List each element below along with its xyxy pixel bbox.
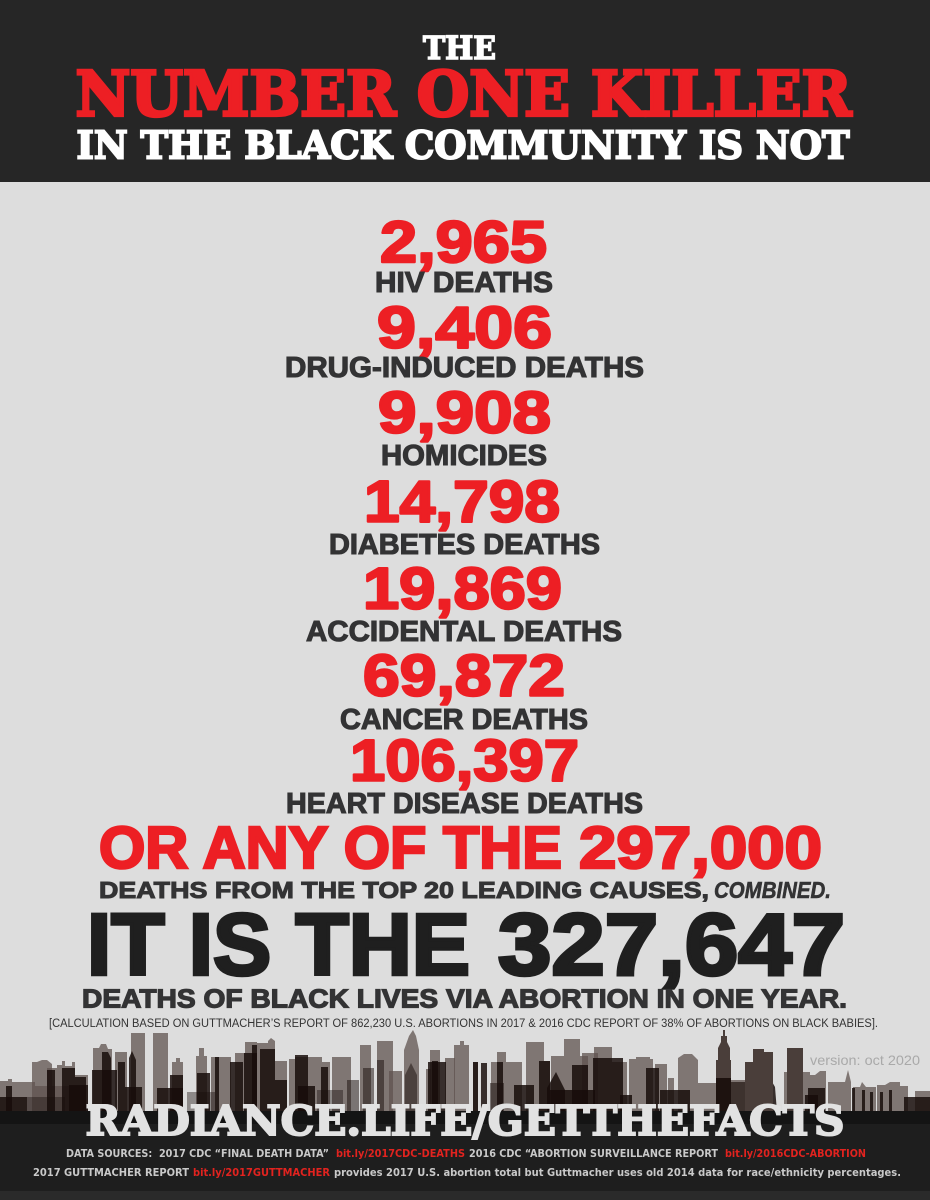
- data sources line 1: [66, 1148, 866, 1160]
- stat: diabetes deaths: DIABETES DEATHS: [329, 529, 600, 561]
- city skyline: [0, 1030, 930, 1112]
- data sources line 1: DATA SOURCES: 2017 CDC “FINAL DEATH DATA”: [66, 1148, 329, 1160]
- stat: diabetes deaths: 14,798: [364, 470, 560, 534]
- stat: homicides: HOMICIDES: [381, 440, 547, 472]
- stat: top 20 causes combined: DEATHS FROM THE TOP 20 LEADING CAUSES,: [99, 877, 709, 903]
- data sources line 2: bit.ly/2017GUTTMACHER: [193, 1167, 330, 1179]
- header band with title: [0, 0, 930, 182]
- stat: heart disease deaths: 106,397: [350, 728, 579, 794]
- stat: cancer deaths: CANCER DEATHS: [340, 704, 588, 736]
- subhead: abortion deaths: DEATHS OF BLACK LIVES VIA ABORTION IN ONE YEAR.: [82, 986, 847, 1014]
- stat: homicides: 9,908: [378, 380, 551, 446]
- title line: THE: THE: [423, 29, 496, 67]
- stat: accidental deaths: 19,869: [363, 556, 562, 622]
- data sources line 2: provides 2017 U.S. abortion total but Guttmacher uses old 2014 data for race/ethnicity percentages.: [334, 1167, 901, 1179]
- footer band: [0, 1096, 930, 1200]
- stat: drug-induced deaths: [285, 296, 644, 384]
- stat: cancer deaths: 69,872: [363, 644, 565, 708]
- stat: top 20 causes combined: 297,000: [579, 815, 822, 881]
- data sources line 2: [33, 1167, 901, 1179]
- stat: accidental deaths: ACCIDENTAL DEATHS: [306, 616, 622, 648]
- empire state tower: [716, 1030, 731, 1112]
- stat: heart disease deaths: HEART DISEASE DEATHS: [286, 788, 643, 820]
- headline stat: 327,647: 327,647: [498, 896, 845, 994]
- data sources line 1: 2016 CDC “ABORTION SURVEILLANCE REPORT: [469, 1148, 719, 1160]
- stat: drug-induced deaths: 9,406: [377, 296, 552, 360]
- data sources line 1: bit.ly/2017CDC-DEATHS: [336, 1148, 465, 1160]
- stat: cancer deaths: [340, 644, 588, 736]
- stat: HIV deaths: HIV DEATHS: [375, 267, 553, 299]
- stat: homicides: [378, 380, 551, 472]
- stat: drug-induced deaths: DRUG-INDUCED DEATHS: [285, 352, 644, 384]
- stat: diabetes deaths: [329, 470, 600, 561]
- title line: in the black community is not: IN THE BLACK COMMUNITY IS NOT: [76, 124, 850, 168]
- stat: top 20 causes combined: [99, 815, 831, 903]
- data sources line 1: bit.ly/2016CDC-ABORTION: [725, 1148, 866, 1160]
- stat: HIV deaths: [375, 210, 553, 299]
- website call to action: RADIANCE.LIFE/GETTHEFACTS: [86, 1096, 845, 1145]
- stat: top 20 causes combined: OR ANY OF THE: [99, 815, 562, 881]
- stat: top 20 causes combined: COMBINED.: [714, 877, 831, 903]
- title line: NUMBER ONE KILLER: NUMBER ONE KILLER: [76, 58, 852, 130]
- calculation note: [CALCULATION BASED ON GUTTMACHER’S REPORT OF 862,230 U.S. ABORTIONS IN 2017 & 2016 CDC REPORT OF 38% OF ABORTIONS ON BLACK BABIES].: [49, 1018, 878, 1030]
- version note: version: oct 2020: [810, 1052, 920, 1068]
- headline stat: 327,647: IT IS THE: [87, 896, 470, 994]
- stat: accidental deaths: [306, 556, 622, 648]
- stat: heart disease deaths: [286, 728, 643, 820]
- stat: HIV deaths: 2,965: [380, 210, 547, 275]
- headline stat: 327,647: [87, 896, 845, 994]
- data sources line 2: 2017 GUTTMACHER REPORT: [33, 1167, 190, 1179]
